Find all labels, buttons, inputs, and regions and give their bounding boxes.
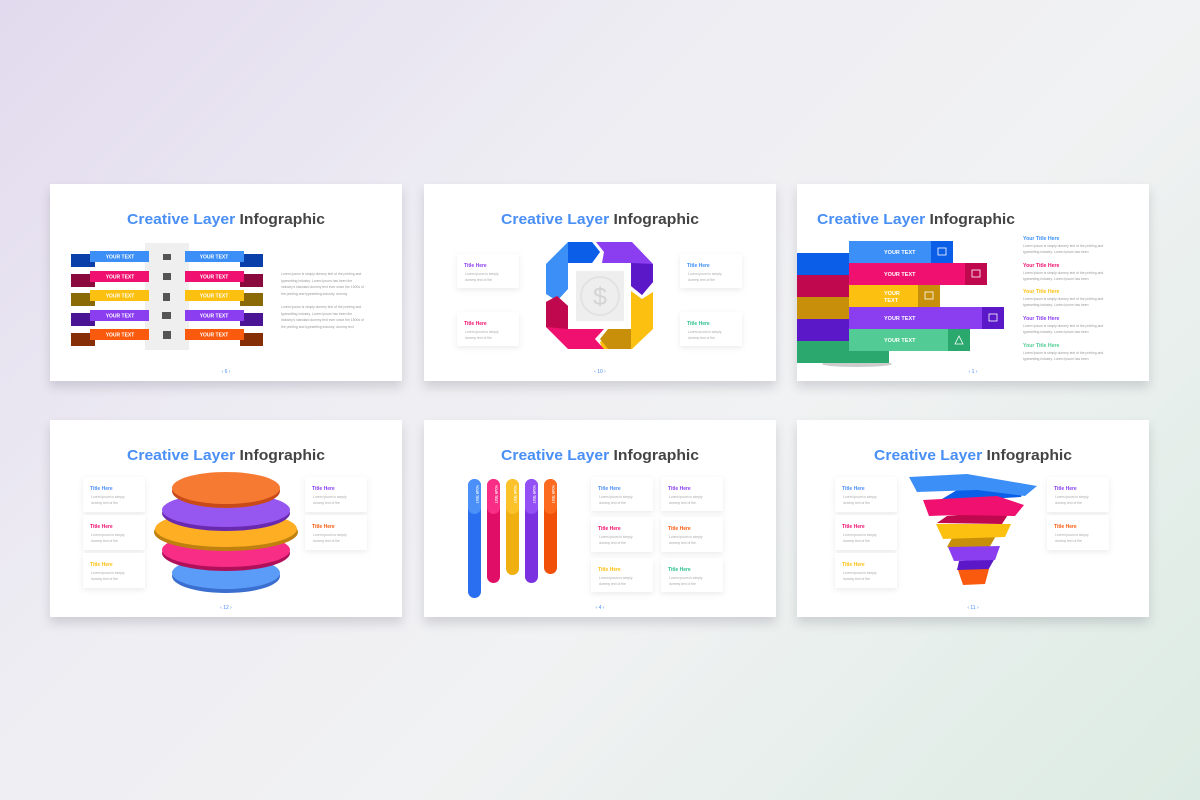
text block: industry's standard dummy text ever since the 1500s of (281, 318, 364, 322)
cards: dummy text of the (843, 501, 870, 505)
cards: Lorem ipsum is simply (465, 330, 499, 334)
slide 2: octagon cycle (424, 184, 776, 381)
cards: dummy text of the (688, 336, 715, 340)
pills: YOUR TEXT (513, 485, 517, 503)
text list: Your Title Here (1023, 343, 1060, 349)
cards (591, 477, 723, 592)
text list: typesetting industry. Lorem Ipsum has been (1023, 277, 1089, 281)
text list: Your Title Here (1023, 316, 1060, 322)
cards: Lorem ipsum is simply (313, 533, 347, 537)
cards: dummy text of the (313, 501, 340, 505)
text list: Lorem Ipsum is simply dummy text of the printing and (1023, 297, 1103, 301)
text list: typesetting industry. Lorem Ipsum has been (1023, 357, 1089, 361)
slide 5: vertical pills (424, 420, 776, 617)
ribbons: YOUR TEXT (200, 254, 228, 260)
ribbons: YOUR TEXT (200, 294, 228, 300)
text list: Lorem Ipsum is simply dummy text of the printing and (1023, 271, 1103, 275)
ribbons (71, 251, 263, 346)
cards: dummy text of the (1055, 501, 1082, 505)
ribbons: YOUR TEXT (106, 294, 134, 300)
cards (83, 477, 367, 588)
title: Creative Layer Infographic (817, 211, 1015, 228)
pills: YOUR TEXT (494, 485, 498, 503)
page number: ‹ 12 › (220, 605, 232, 611)
pills: YOUR TEXT (551, 485, 555, 503)
cards: Title Here (464, 321, 487, 327)
cards: Title Here (687, 263, 710, 269)
cards: dummy text of the (465, 336, 492, 340)
ribbons: YOUR TEXT (200, 274, 228, 280)
cards: Lorem ipsum is simply (599, 535, 633, 539)
cards: Title Here (90, 562, 113, 568)
ribbons: YOUR TEXT (106, 314, 134, 320)
title: Creative Layer Infographic (501, 447, 699, 464)
center panel with icons (145, 243, 189, 350)
cards: Title Here (842, 486, 865, 492)
ribbons: YOUR TEXT (106, 332, 134, 338)
cards (457, 254, 742, 346)
ribbons: YOUR TEXT (200, 314, 228, 320)
text block: the printing and typesetting industry. dummy (281, 292, 348, 296)
cards: Lorem ipsum is simply (843, 495, 877, 499)
cards: Title Here (598, 486, 621, 492)
slide 3: stacked bars (797, 184, 1149, 381)
cards: dummy text of the (599, 582, 626, 586)
text list: Your Title Here (1023, 236, 1060, 242)
cards: Lorem ipsum is simply (669, 495, 703, 499)
cards: dummy text of the (669, 541, 696, 545)
text list: typesetting industry. Lorem Ipsum has been (1023, 330, 1089, 334)
cards: Title Here (312, 524, 335, 530)
text list: Your Title Here (1023, 263, 1060, 269)
text block: Lorem Ipsum is simply dummy text of the printing and (281, 305, 361, 309)
cards: dummy text of the (91, 577, 118, 581)
front bars: YOUR TEXT (884, 316, 916, 322)
pills (468, 479, 557, 598)
cards: dummy text of the (1055, 539, 1082, 543)
cards: Lorem ipsum is simply (599, 576, 633, 580)
cards: Lorem ipsum is simply (1055, 495, 1089, 499)
title: Creative Layer Infographic (127, 211, 325, 228)
page number: ‹ 11 › (967, 605, 979, 611)
pills: YOUR TEXT (532, 485, 536, 503)
cards: Lorem ipsum is simply (843, 533, 877, 537)
page number: ‹ 6 › (222, 369, 231, 375)
cards: Title Here (90, 524, 113, 530)
cards: Lorem ipsum is simply (465, 272, 499, 276)
cards (835, 477, 1109, 588)
cards: Title Here (90, 486, 113, 492)
text list: typesetting industry. Lorem Ipsum has been (1023, 250, 1089, 254)
slide 4: disc stack (50, 420, 402, 617)
slide 6: spiral funnel (797, 420, 1149, 617)
cards: dummy text of the (91, 501, 118, 505)
cards: Lorem ipsum is simply (669, 535, 703, 539)
cards: Title Here (842, 524, 865, 530)
text list: Your Title Here (1023, 289, 1060, 295)
cards: Lorem ipsum is simply (1055, 533, 1089, 537)
text list: Lorem Ipsum is simply dummy text of the printing and (1023, 351, 1103, 355)
text block: the printing and typesetting industry. dummy text (281, 325, 354, 329)
page number: ‹ 4 › (596, 605, 605, 611)
front bars: YOUR TEXT (884, 338, 916, 344)
cards: Title Here (668, 486, 691, 492)
discs (154, 472, 298, 593)
cards: Title Here (598, 567, 621, 573)
cards: Title Here (668, 526, 691, 532)
cards: dummy text of the (669, 582, 696, 586)
front bars: YOUR TEXT (884, 250, 916, 256)
cards: Lorem ipsum is simply (688, 272, 722, 276)
back stack (797, 253, 892, 367)
cards: Lorem ipsum is simply (669, 576, 703, 580)
text list: Lorem Ipsum is simply dummy text of the printing and (1023, 324, 1103, 328)
cards: dummy text of the (465, 278, 492, 282)
ribbons: YOUR TEXT (200, 332, 228, 338)
cycle diagram: $ (593, 283, 607, 311)
funnel (909, 474, 1037, 585)
text block: Lorem Ipsum is simply dummy text of the printing and (281, 272, 361, 276)
pills: YOUR TEXT (475, 485, 479, 503)
title: Creative Layer Infographic (874, 447, 1072, 464)
cards: dummy text of the (843, 577, 870, 581)
cards: Title Here (464, 263, 487, 269)
cards: Title Here (598, 526, 621, 532)
text block: typesetting industry. Lorem Ipsum has been the (281, 279, 352, 283)
cards: dummy text of the (843, 539, 870, 543)
cards: Title Here (842, 562, 865, 568)
page number: ‹ 1 › (969, 369, 978, 375)
text list (1023, 236, 1103, 361)
ribbons: YOUR TEXT (106, 274, 134, 280)
cards: Lorem ipsum is simply (91, 495, 125, 499)
cards: dummy text of the (313, 539, 340, 543)
text list: Lorem Ipsum is simply dummy text of the printing and (1023, 244, 1103, 248)
front bars: YOUR (884, 291, 900, 297)
cards: Lorem ipsum is simply (843, 571, 877, 575)
cards: Title Here (687, 321, 710, 327)
cards: Title Here (1054, 524, 1077, 530)
cards: Lorem ipsum is simply (599, 495, 633, 499)
cards: Lorem ipsum is simply (313, 495, 347, 499)
cards: Lorem ipsum is simply (91, 571, 125, 575)
text block: typesetting industry. Lorem Ipsum has been the (281, 312, 352, 316)
cards: Lorem ipsum is simply (688, 330, 722, 334)
page number: ‹ 10 › (594, 369, 606, 375)
cards: Title Here (312, 486, 335, 492)
cards: dummy text of the (599, 501, 626, 505)
text block (281, 272, 364, 329)
cards: dummy text of the (669, 501, 696, 505)
front bars (849, 241, 1004, 351)
cycle diagram (546, 242, 653, 349)
front bars: YOUR TEXT (884, 272, 916, 278)
cards: Title Here (668, 567, 691, 573)
slide 1: ribbon layers (50, 184, 402, 381)
cards: Title Here (1054, 486, 1077, 492)
cards: Lorem ipsum is simply (91, 533, 125, 537)
text list: typesetting industry. Lorem Ipsum has been (1023, 303, 1089, 307)
text block: industry's standard dummy text ever since the 1500s of (281, 285, 364, 289)
cards: dummy text of the (688, 278, 715, 282)
cards: dummy text of the (599, 541, 626, 545)
title: Creative Layer Infographic (501, 211, 699, 228)
ribbons: YOUR TEXT (106, 254, 134, 260)
title: Creative Layer Infographic (127, 447, 325, 464)
front bars: TEXT (884, 298, 899, 304)
cards: dummy text of the (91, 539, 118, 543)
